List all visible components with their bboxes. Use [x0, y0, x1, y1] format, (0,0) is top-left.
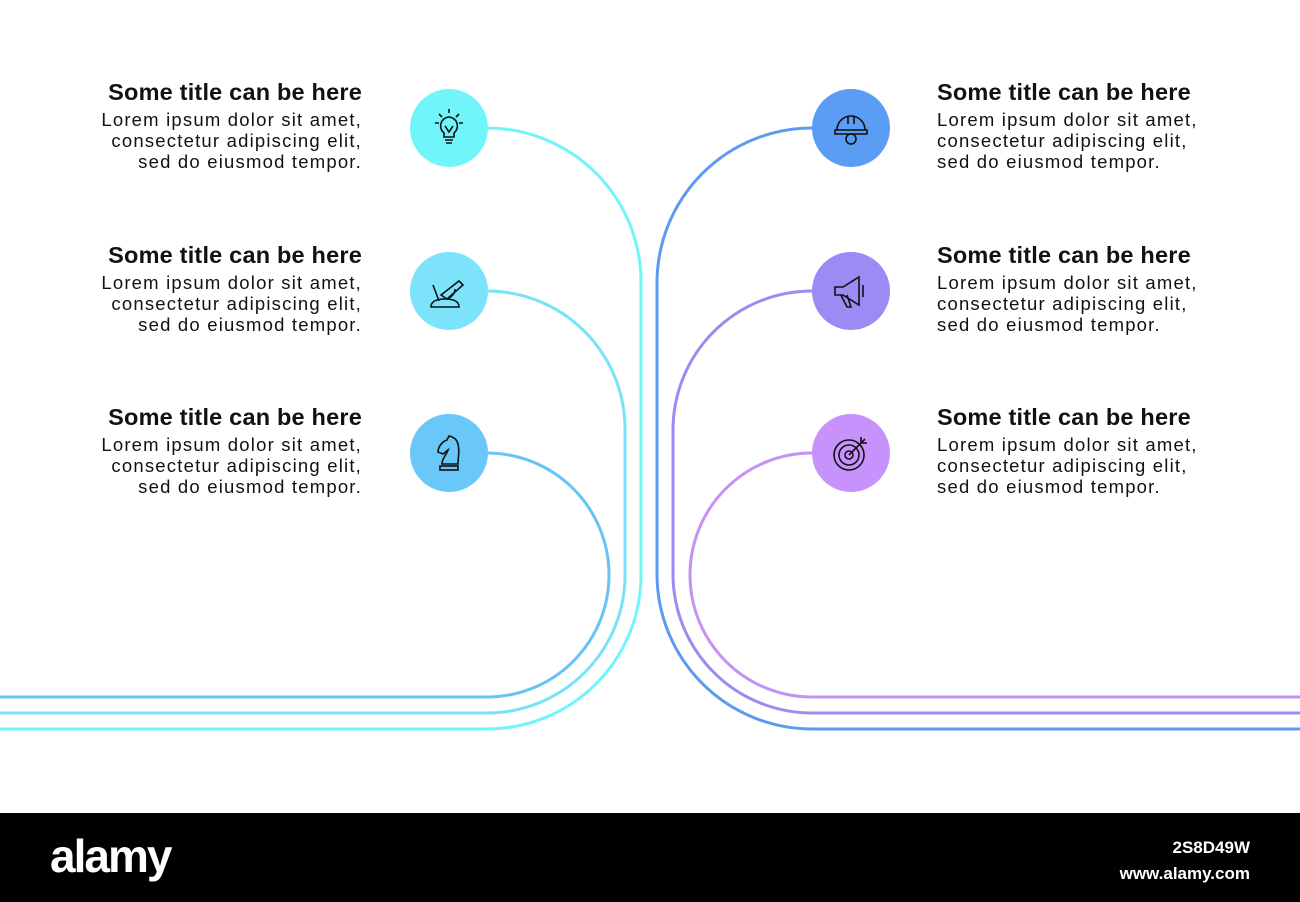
text block: right 2: consectetur adipiscing elit,	[937, 293, 1188, 314]
text block: left 3: Lorem ipsum dolor sit amet,	[101, 434, 362, 455]
image id: www.alamy.com	[1120, 864, 1250, 883]
text block: right 2: sed do eiusmod tempor.	[937, 314, 1161, 335]
icon: target	[812, 414, 890, 492]
text block: left 3: Some title can be here	[108, 404, 362, 430]
text block: right 1: Lorem ipsum dolor sit amet,	[937, 109, 1198, 130]
text block: left 1: Lorem ipsum dolor sit amet,	[101, 109, 362, 130]
text block: right 3: Some title can be here	[937, 404, 1191, 430]
text block: left 1	[101, 79, 362, 172]
text block: left 2	[101, 242, 362, 335]
text block: right 3: Lorem ipsum dolor sit amet,	[937, 434, 1198, 455]
text block: right 3: sed do eiusmod tempor.	[937, 476, 1161, 497]
image id: 2S8D49W	[1173, 838, 1250, 857]
text block: right 2	[937, 242, 1198, 335]
text block: right 2: Lorem ipsum dolor sit amet,	[937, 272, 1198, 293]
text block: right 1: sed do eiusmod tempor.	[937, 151, 1161, 172]
text block: left 1: sed do eiusmod tempor.	[138, 151, 362, 172]
text block: left 2: sed do eiusmod tempor.	[138, 314, 362, 335]
text block: right 2: Some title can be here	[937, 242, 1191, 268]
text block: left 2: consectetur adipiscing elit,	[111, 293, 362, 314]
icon: lightbulb	[410, 89, 488, 167]
image id	[1120, 838, 1250, 883]
footer bar	[0, 813, 1300, 902]
text block: right 1: Some title can be here	[937, 79, 1191, 105]
logo: alamy	[50, 830, 170, 882]
text block: left 3: sed do eiusmod tempor.	[138, 476, 362, 497]
text block: left 2: Lorem ipsum dolor sit amet,	[101, 272, 362, 293]
icon: microscope	[410, 252, 488, 330]
icon: megaphone	[812, 252, 890, 330]
text block: left 1: Some title can be here	[108, 79, 362, 105]
text block: right 1	[937, 79, 1198, 172]
text block: left 2: Some title can be here	[108, 242, 362, 268]
text block: right 1: consectetur adipiscing elit,	[937, 130, 1188, 151]
text block: left 3	[101, 404, 362, 497]
text block: right 3: consectetur adipiscing elit,	[937, 455, 1188, 476]
icon: helmet gear	[812, 89, 890, 167]
text block: left 3: consectetur adipiscing elit,	[111, 455, 362, 476]
text block: right 3	[937, 404, 1198, 497]
text block: left 1: consectetur adipiscing elit,	[111, 130, 362, 151]
icon: chess knight	[410, 414, 488, 492]
